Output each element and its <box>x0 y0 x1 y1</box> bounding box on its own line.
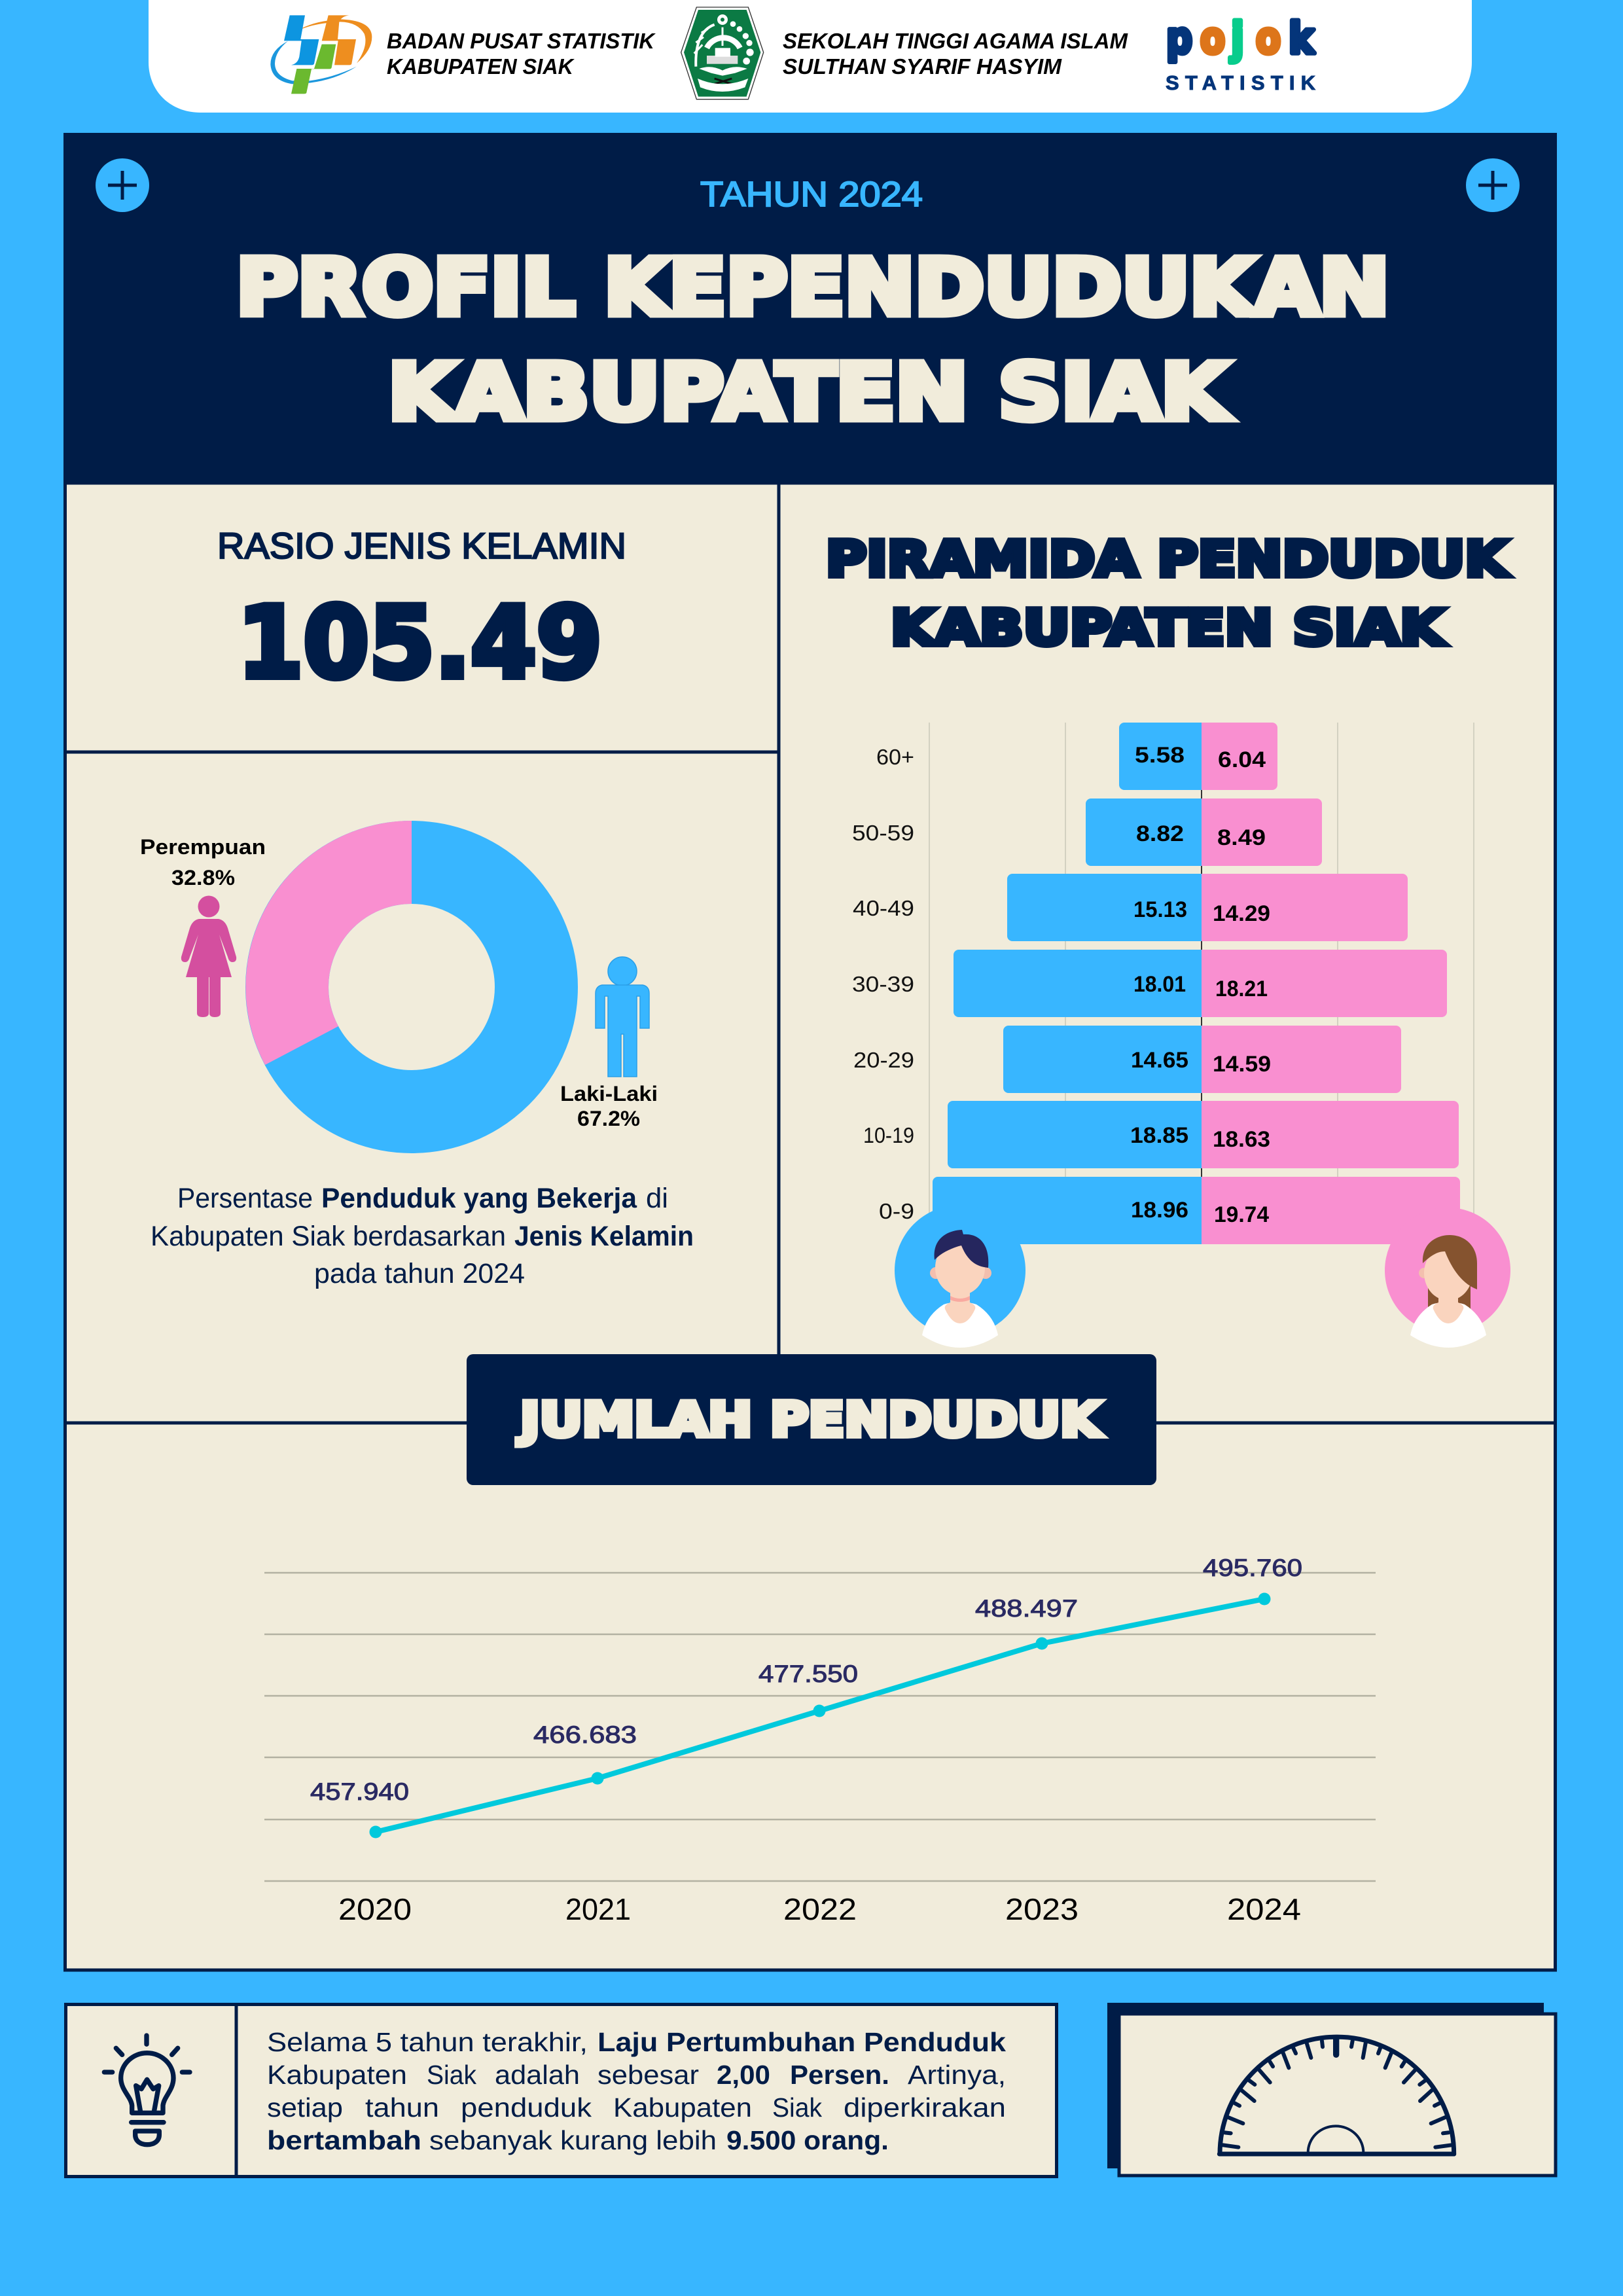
panel: total population <box>264 1354 1376 1926</box>
label: female: 32.8% <box>171 866 235 889</box>
text: growth rate note: penduduk <box>461 2092 592 2123</box>
text: growth rate note: Artinya, <box>908 2060 1006 2090</box>
icon: woman <box>181 895 236 1017</box>
logo: pojok statistik: j <box>1229 13 1244 63</box>
text: growth rate note: Kabupaten <box>613 2092 752 2123</box>
heading: pyramid <box>826 530 1510 656</box>
female values: 18.21 <box>1215 977 1268 1001</box>
heading: sex ratio: RASIO JENIS KELAMIN <box>217 525 626 566</box>
text: donut caption: pada tahun 2024 <box>314 1258 525 1289</box>
data labels: 457.940 <box>310 1778 409 1805</box>
panel: sex ratio <box>217 525 626 700</box>
text: STAI name: SEKOLAH TINGGI AGAMA ISLAM <box>783 29 1129 53</box>
text: growth rate note: Persen. <box>790 2060 889 2090</box>
header logo bar <box>149 0 1472 113</box>
female values: 18.63 <box>1213 1127 1270 1152</box>
text: STAI name: SULTHAN SYARIF HASYIM <box>783 54 1063 79</box>
label: female <box>140 835 266 889</box>
age labels: 10-19 <box>863 1123 914 1147</box>
male values: 18.01 <box>1133 972 1186 997</box>
male bars <box>933 723 1202 1244</box>
male values <box>1130 743 1188 1223</box>
panel: employment donut <box>140 821 694 1289</box>
title: PROFIL KEPENDUDUKAN <box>236 242 1389 332</box>
text: STAI name <box>783 29 1129 79</box>
age labels: 50-59 <box>852 821 914 845</box>
icon: plus left <box>96 158 149 212</box>
heading: jumlah penduduk: JUMLAH PENDUDUK <box>516 1392 1102 1447</box>
label: male: Laki-Laki <box>560 1082 658 1105</box>
logo: pojok statistik <box>1166 13 1316 94</box>
text: BPS name <box>387 29 656 79</box>
year label: TAHUN 2024 <box>700 175 923 214</box>
year axis: 2023 <box>1005 1892 1079 1926</box>
female values: 14.29 <box>1213 901 1270 926</box>
age labels: 60+ <box>876 745 914 769</box>
donut chart <box>245 821 537 1111</box>
text: growth rate note: sebesar <box>597 2060 699 2090</box>
text: growth rate note: tahun <box>365 2092 439 2123</box>
logo: pojok statistik: p <box>1166 13 1192 63</box>
logo: pojok statistik: STATISTIK <box>1166 71 1316 94</box>
panel: gauge card <box>1107 2003 1556 2176</box>
female bars <box>1202 723 1460 1244</box>
text: growth rate note: setiap <box>267 2092 343 2123</box>
text: BPS name: BADAN PUSAT STATISTIK <box>387 29 656 53</box>
text: donut caption <box>151 1183 694 1289</box>
logo: pojok statistik: o <box>1200 13 1225 63</box>
male values: 18.96 <box>1131 1198 1188 1223</box>
line chart <box>264 1554 1376 1926</box>
text: growth rate note <box>267 2027 1006 2155</box>
male values: 18.85 <box>1130 1123 1188 1148</box>
data labels: 488.497 <box>975 1595 1078 1622</box>
female values: 8.49 <box>1217 825 1266 850</box>
icon: man <box>596 957 649 1077</box>
male values: 5.58 <box>1135 743 1185 768</box>
title banner <box>63 133 1557 483</box>
text: growth rate note: Laju Pertumbuhan Penduduk <box>597 2027 1006 2057</box>
heading: pyramid: KABUPATEN SIAK <box>891 599 1446 656</box>
data labels: 495.760 <box>1203 1554 1302 1581</box>
panel dividers <box>67 483 1554 1423</box>
text: donut caption: di <box>646 1183 668 1214</box>
text: growth rate note: diperkirakan <box>844 2092 1006 2123</box>
text: donut caption: Kabupaten Siak berdasarkan <box>151 1221 506 1252</box>
text: growth rate note: sebanyak kurang lebih <box>429 2125 717 2155</box>
female values <box>1213 747 1271 1227</box>
male values: 8.82 <box>1136 821 1184 846</box>
title: KABUPATEN SIAK <box>388 347 1232 437</box>
text: growth rate note: Selama 5 tahun terakhir, <box>267 2027 588 2057</box>
year axis: 2022 <box>783 1892 857 1926</box>
text: growth rate note: 2,00 <box>717 2060 770 2090</box>
icon: plus right <box>1466 158 1520 212</box>
age labels <box>852 745 914 1223</box>
female values: 14.59 <box>1213 1052 1271 1077</box>
icon: light bulb <box>104 2036 190 2145</box>
text: donut caption: Jenis Kelamin <box>514 1221 694 1252</box>
male values: 15.13 <box>1133 897 1187 922</box>
text: donut caption: Penduduk yang Bekerja <box>321 1183 637 1214</box>
icon: male avatar <box>895 1205 1026 1348</box>
male values: 14.65 <box>1131 1048 1188 1073</box>
label: male: 67.2% <box>577 1107 640 1130</box>
text: growth rate note: bertambah <box>267 2125 421 2155</box>
pyramid chart <box>852 723 1474 1244</box>
title <box>236 242 1389 437</box>
text: donut caption: Persentase <box>177 1183 313 1214</box>
text: growth rate note: Kabupaten <box>267 2060 407 2090</box>
year axis: 2021 <box>565 1892 631 1926</box>
age labels: 0-9 <box>879 1199 914 1223</box>
data labels <box>310 1554 1302 1805</box>
logo: BPS <box>270 15 372 94</box>
text: BPS name: KABUPATEN SIAK <box>387 54 575 79</box>
female values: 19.74 <box>1214 1202 1269 1227</box>
text: growth rate note: adalah <box>495 2060 580 2090</box>
text: growth rate note: Siak <box>772 2092 822 2123</box>
text: growth rate note: 9.500 orang. <box>726 2125 889 2155</box>
label: male <box>560 1082 658 1130</box>
data labels: 477.550 <box>758 1660 858 1687</box>
age labels: 30-39 <box>852 972 914 996</box>
logo: pojok statistik: o <box>1256 13 1281 63</box>
panel: growth insight <box>65 2003 1056 2178</box>
year axis <box>338 1892 1301 1926</box>
panel: population pyramid <box>826 530 1510 1348</box>
value: sex ratio: 105.49 <box>238 586 602 700</box>
label: female: Perempuan <box>140 835 266 859</box>
heading: jumlah penduduk <box>467 1354 1156 1485</box>
text: growth rate note: Siak <box>427 2060 476 2090</box>
data labels: 466.683 <box>533 1721 637 1748</box>
year axis: 2024 <box>1227 1892 1301 1926</box>
age labels: 20-29 <box>853 1048 914 1072</box>
age labels: 40-49 <box>853 896 914 920</box>
panel: main frame background <box>65 483 1555 1970</box>
trend line <box>369 1593 1271 1838</box>
year axis: 2020 <box>338 1892 412 1926</box>
logo: pojok statistik: k <box>1289 13 1315 63</box>
icon: female avatar <box>1385 1208 1510 1348</box>
icon: gauge <box>1219 2037 1454 2154</box>
logo: STAI emblem <box>681 7 764 99</box>
female values: 6.04 <box>1218 747 1266 772</box>
heading: pyramid: PIRAMIDA PENDUDUK <box>826 530 1510 588</box>
